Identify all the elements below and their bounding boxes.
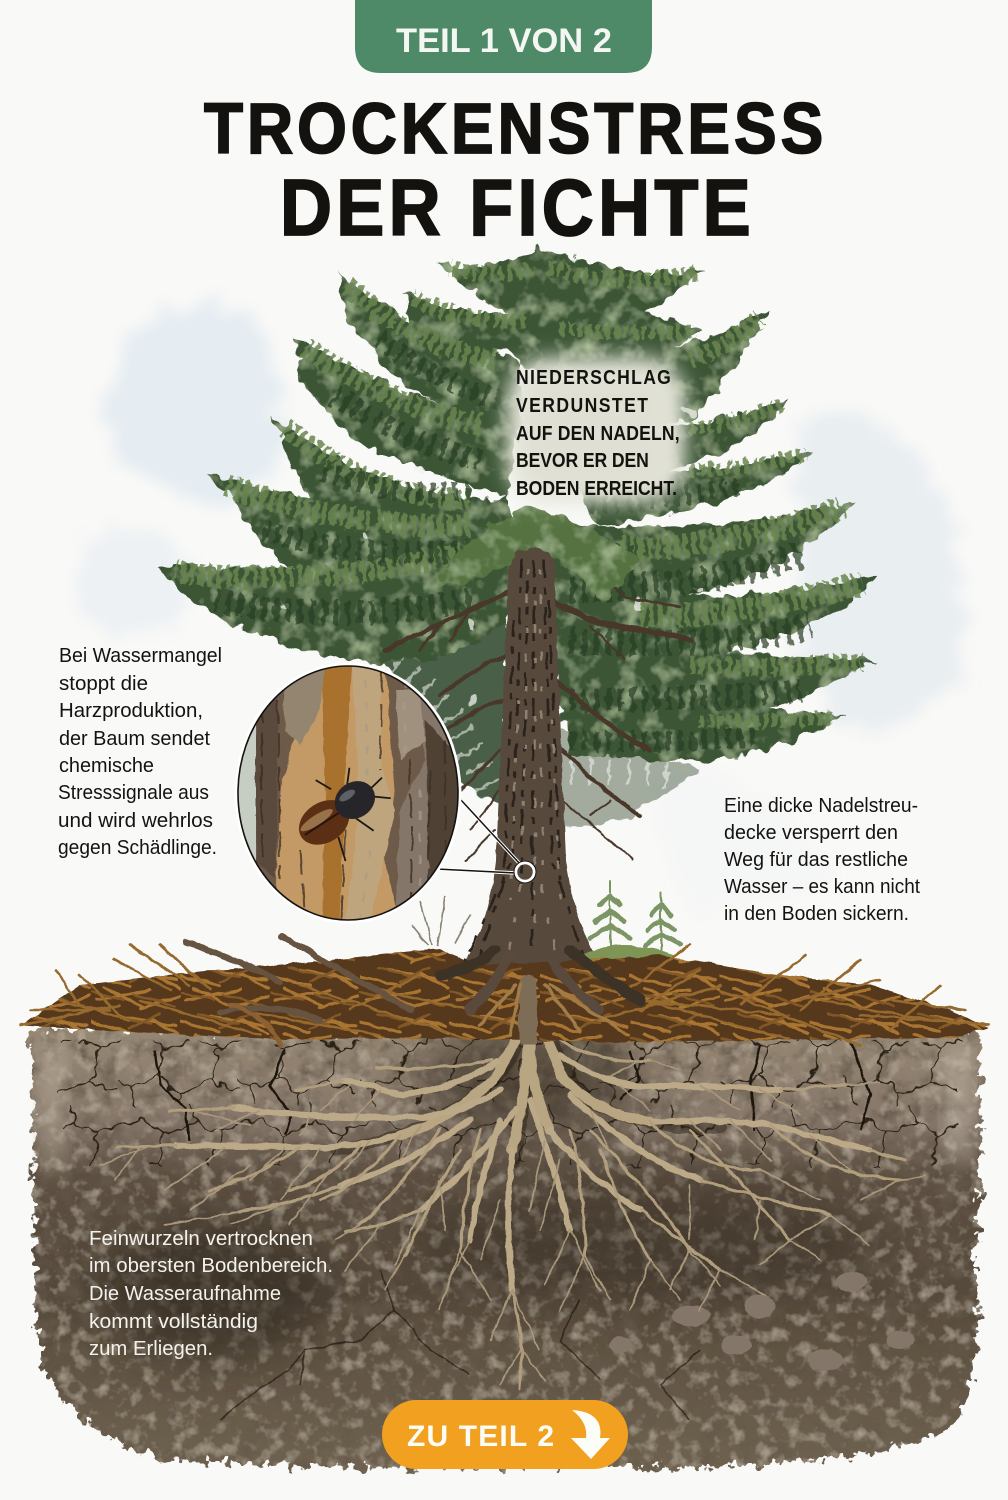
top foliage over trunk (425, 505, 640, 600)
text: resin and stress signals: Stresssignale aus (58, 781, 209, 804)
lens image (235, 660, 462, 925)
text: needle litter: in den Boden sickern. (724, 902, 909, 925)
root shadow (335, 1003, 722, 1163)
loose twigs (20, 936, 990, 1045)
text: fine roots: zum Erliegen. (89, 1337, 213, 1360)
callout patch: evaporation: AUF DEN NADELN, (516, 422, 680, 444)
trunk side branches (385, 570, 690, 860)
needle litter layer (20, 936, 990, 1045)
frond needles shadow (215, 335, 810, 742)
callout patch: evaporation: BODEN ERREICHT. (516, 477, 677, 499)
icon: saplings (412, 882, 680, 968)
lower foliage needles (395, 665, 680, 790)
text: resin and stress signals: Bei Wassermangel (59, 644, 222, 667)
title (204, 90, 823, 253)
cracked top soil (60, 1040, 960, 1165)
text: fine roots: kommt vollständig (89, 1310, 258, 1333)
title: TROCKENSTRESS (204, 90, 823, 169)
apex highlight (531, 252, 545, 340)
text: resin and stress signals: stoppt die (59, 672, 148, 695)
icon: curved arrow (571, 1410, 610, 1459)
callout patch: evaporation: NIEDERSCHLAG (516, 366, 671, 388)
frond needles highlight (175, 268, 862, 722)
button: next part (382, 1400, 628, 1469)
text: needle litter: Wasser – es kann nicht (724, 875, 920, 898)
dark patch behind root zone and text (100, 1220, 330, 1360)
banner: part indicator: TEIL 1 VON 2 (396, 22, 612, 60)
trunk (425, 540, 640, 995)
text: needle litter: Eine dicke Nadelstreu- (724, 794, 918, 817)
button: next part: ZU TEIL 2 (407, 1420, 554, 1453)
lower sparse foliage (385, 600, 700, 830)
connector lines (437, 800, 520, 873)
callout patch: evaporation (508, 358, 684, 502)
canopy dark mass (155, 246, 875, 762)
main roots (400, 1000, 650, 1150)
text: needle litter (724, 794, 920, 925)
wide cracks (155, 1040, 870, 1420)
text: resin and stress signals (58, 644, 222, 859)
text: resin and stress signals: chemische (59, 754, 154, 777)
title: DER FICHTE (280, 164, 751, 253)
watercolour sky left (79, 305, 281, 640)
stones (608, 1272, 914, 1371)
text: resin and stress signals: Harzproduktion, (59, 699, 203, 722)
text: fine roots: Feinwurzeln vertrocknen (89, 1227, 313, 1250)
pale right edge (945, 1045, 970, 1170)
watercolour sky right (640, 414, 968, 920)
banner: part indicator (355, 0, 652, 73)
illustration: spruce tree (155, 246, 875, 995)
pale left edge (40, 1045, 65, 1170)
text: needle litter: Weg für das restliche (724, 848, 908, 871)
text: fine roots (89, 1227, 333, 1360)
text: fine roots: Die Wasseraufnahme (89, 1282, 281, 1305)
lens ring (236, 664, 460, 922)
lens: bark beetle detail (235, 660, 536, 925)
beetle (298, 768, 391, 862)
text: needle litter: decke versperrt den (724, 821, 898, 844)
marker ring (516, 862, 534, 882)
callout patch: evaporation: VERDUNSTET (516, 394, 648, 416)
callout patch: evaporation: BEVOR ER DEN (516, 449, 649, 471)
text: resin and stress signals: und wird wehrlos (58, 809, 213, 832)
soil cross-section (30, 1025, 981, 1468)
text: resin and stress signals: der Baum sendet (59, 727, 210, 750)
text: fine roots: im obersten Bodenbereich. (89, 1254, 333, 1277)
canopy gaps (279, 406, 796, 704)
trunk root collar (440, 950, 640, 1040)
text: resin and stress signals: gegen Schädlinge. (58, 836, 217, 859)
root system (100, 1000, 925, 1390)
